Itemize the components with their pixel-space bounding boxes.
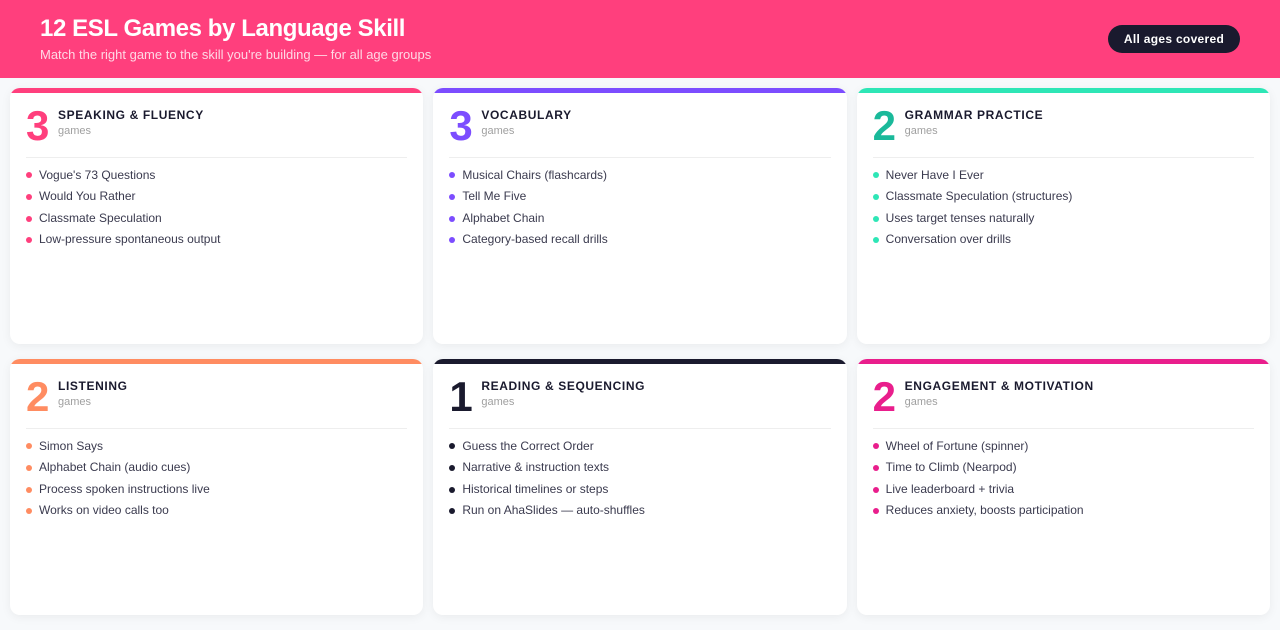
bullet: grammar 4	[873, 236, 879, 242]
unit label: grammar: games	[905, 125, 938, 137]
list item: reading 1: Guess the Correct Order	[462, 439, 594, 453]
panel: speaking and fluency	[10, 88, 423, 344]
unit label: engagement: games	[905, 396, 938, 408]
bullet: speaking 1	[26, 172, 32, 178]
heading: speaking: SPEAKING & FLUENCY	[58, 108, 204, 122]
list item: reading 3: Historical timelines or steps	[462, 482, 608, 496]
list item: listening 4: Works on video calls too	[39, 503, 169, 517]
bullet: grammar 3	[873, 216, 879, 222]
list item: speaking 3: Classmate Speculation	[39, 211, 162, 225]
list item: speaking 4: Low-pressure spontaneous output	[39, 232, 220, 246]
list item: engagement 1: Wheel of Fortune (spinner)	[886, 439, 1028, 453]
list item: grammar 2: Classmate Speculation (structures)	[886, 189, 1072, 203]
list item: engagement 2: Time to Climb (Nearpod)	[886, 460, 1017, 474]
list item: engagement 3: Live leaderboard + trivia	[886, 482, 1014, 496]
list item: listening 1: Simon Says	[39, 439, 103, 453]
list item: engagement 4: Reduces anxiety, boosts participation	[886, 503, 1084, 517]
list item: grammar 1: Never Have I Ever	[886, 168, 984, 182]
bullet: reading 3	[449, 486, 455, 492]
subtitle: Match the right game to the skill you're building — for all age groups	[40, 47, 431, 62]
count: grammar: 2	[873, 102, 896, 149]
count: engagement: 2	[873, 373, 896, 420]
unit label: listening: games	[58, 396, 91, 408]
bullet: speaking 4	[26, 236, 32, 242]
list item: reading 2: Narrative & instruction texts	[462, 460, 609, 474]
bullet: engagement 1	[873, 443, 879, 449]
list item: vocabulary 1: Musical Chairs (flashcards)	[462, 168, 607, 182]
header banner	[0, 0, 1280, 78]
panel: grammar practice	[857, 88, 1270, 344]
bullet: engagement 2	[873, 464, 879, 470]
unit label: speaking: games	[58, 125, 91, 137]
bullet: vocabulary 4	[449, 236, 455, 242]
bullet: listening 1	[26, 443, 32, 449]
heading: engagement: ENGAGEMENT & MOTIVATION	[905, 379, 1094, 393]
bullet: listening 3	[26, 486, 32, 492]
panel: listening	[10, 359, 423, 615]
unit label: reading: games	[481, 396, 514, 408]
count: reading: 1	[449, 373, 473, 420]
panel: reading and sequencing	[433, 359, 847, 615]
list item: vocabulary 3: Alphabet Chain	[462, 211, 544, 225]
bullet: speaking 2	[26, 194, 32, 200]
list item: listening 2: Alphabet Chain (audio cues)	[39, 460, 190, 474]
panel: vocabulary	[433, 88, 847, 344]
list item: grammar 4: Conversation over drills	[886, 232, 1011, 246]
bullet: vocabulary 1	[449, 172, 455, 178]
list item: speaking 2: Would You Rather	[39, 189, 136, 203]
bullet: reading 4	[449, 508, 455, 514]
bullet: grammar 2	[873, 194, 879, 200]
list item: grammar 3: Uses target tenses naturally	[886, 211, 1034, 225]
count: vocabulary: 3	[449, 102, 473, 149]
panel: engagement and motivation	[857, 359, 1270, 615]
unit label: vocabulary: games	[481, 125, 514, 137]
count: listening: 2	[26, 373, 49, 420]
count: speaking: 3	[26, 102, 49, 149]
heading: listening: LISTENING	[58, 379, 128, 393]
list item: speaking 1: Vogue's 73 Questions	[39, 168, 155, 182]
badge: all ages covered	[1108, 25, 1240, 53]
title: 12 ESL Games by Language Skill	[40, 15, 405, 42]
bullet: reading 1	[449, 443, 455, 449]
bullet: listening 2	[26, 464, 32, 470]
bullet: reading 2	[449, 464, 455, 470]
bullet: vocabulary 2	[449, 194, 455, 200]
badge: all ages covered: All ages covered	[1124, 32, 1224, 46]
bullet: listening 4	[26, 508, 32, 514]
bullet: engagement 3	[873, 486, 879, 492]
list item: vocabulary 4: Category-based recall drills	[462, 232, 608, 246]
heading: grammar: GRAMMAR PRACTICE	[905, 108, 1043, 122]
list item: vocabulary 2: Tell Me Five	[462, 189, 526, 203]
bullet: grammar 1	[873, 172, 879, 178]
bullet: vocabulary 3	[449, 216, 455, 222]
list item: reading 4: Run on AhaSlides — auto-shuffles	[462, 503, 645, 517]
heading: reading: READING & SEQUENCING	[481, 379, 645, 393]
heading: vocabulary: VOCABULARY	[481, 108, 572, 122]
bullet: engagement 4	[873, 508, 879, 514]
bullet: speaking 3	[26, 216, 32, 222]
list item: listening 3: Process spoken instructions live	[39, 482, 210, 496]
